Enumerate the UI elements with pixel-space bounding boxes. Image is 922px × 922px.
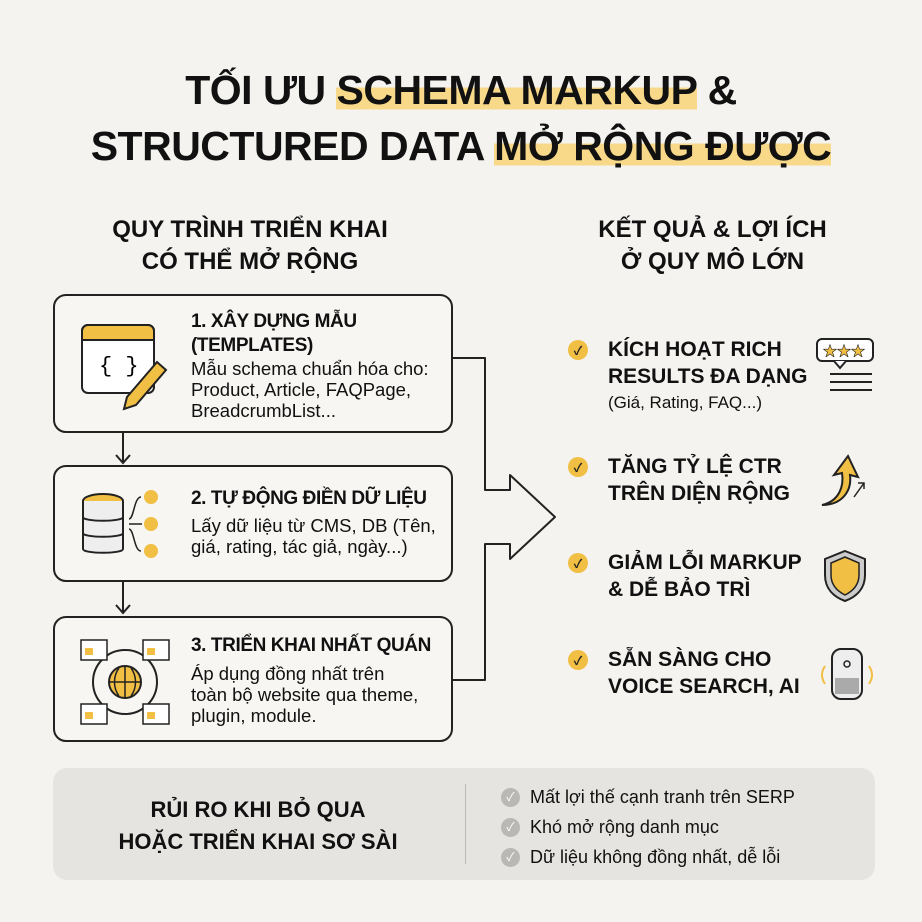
text: step 2 (191, 486, 436, 557)
benefit 1: ✓ (574, 344, 582, 358)
text: step 3: Áp dụng đồng nhất trên (191, 663, 384, 684)
benefit 2 (568, 454, 865, 506)
heading: right (598, 215, 827, 275)
benefit 2: ✓ (574, 460, 582, 474)
risks list (501, 787, 795, 867)
benefit 2: TRÊN DIỆN RỘNG (608, 482, 790, 505)
heading: right: Ở QUY MÔ LỚN (621, 248, 804, 275)
benefit 2: TĂNG TỶ LỆ CTR (608, 455, 782, 478)
arrow: down 2 (115, 582, 131, 614)
text: step 3 (191, 634, 431, 726)
icon: globe network (80, 639, 170, 725)
text: step 1: 1. XÂY DỰNG MẪU (191, 311, 357, 332)
heading: left: CÓ THỂ MỞ RỘNG (142, 248, 358, 275)
risks list: Mất lợi thế cạnh tranh trên SERP (530, 787, 795, 807)
text: step 2: Lấy dữ liệu từ CMS, DB (Tên, (191, 515, 436, 536)
benefit 4: ✓ (574, 654, 582, 668)
benefit 3: ✓ (574, 556, 582, 570)
risks list: Dữ liệu không đồng nhất, dễ lỗi (530, 847, 780, 867)
text: step 3: plugin, module. (191, 705, 316, 726)
icon: shield (824, 550, 866, 602)
text: step 2: 2. TỰ ĐỘNG ĐIỀN DỮ LIỆU (191, 488, 427, 509)
benefit 1: (Giá, Rating, FAQ...) (608, 393, 762, 412)
icon: rating (816, 338, 874, 391)
benefit 3: GIẢM LỖI MARKUP (608, 551, 802, 574)
text: step 3: 3. TRIỂN KHAI NHẤT QUÁN (191, 635, 431, 656)
benefit 4 (568, 647, 873, 700)
benefit 4: SẴN SÀNG CHO (608, 648, 771, 671)
panel: step 1 (53, 294, 453, 433)
text: step 1: (TEMPLATES) (191, 335, 313, 356)
icon: code template (81, 324, 168, 410)
title: STRUCTURED DATA MỞ RỘNG ĐƯỢC (91, 123, 831, 169)
heading: left (112, 216, 388, 275)
benefit 3: & DỄ BẢO TRÌ (608, 578, 750, 601)
risks list: ✓ (506, 820, 515, 834)
text: step 1: Mẫu schema chuẩn hóa cho: (191, 358, 429, 379)
risks heading: HOẶC TRIỂN KHAI SƠ SÀI (118, 829, 398, 854)
benefit 1 (568, 337, 874, 412)
risks list: ✓ (506, 790, 515, 804)
connector arrow (453, 357, 556, 681)
panel: step 2 (53, 465, 453, 582)
icon: smart speaker (821, 648, 873, 700)
arrow: down 1 (115, 433, 131, 464)
heading: left: QUY TRÌNH TRIỂN KHAI (112, 216, 388, 243)
text: step 3: toàn bộ website qua theme, (191, 684, 418, 705)
benefit 3 (568, 550, 866, 602)
risks heading (118, 796, 398, 854)
panel: risks (53, 768, 875, 880)
text: step 1 (191, 310, 429, 421)
benefit 1: RESULTS ĐA DẠNG (608, 365, 808, 388)
icon: rating: ★★★ (823, 343, 865, 359)
benefit 1: KÍCH HOẠT RICH (608, 338, 782, 361)
text: step 1: Product, Article, FAQPage, (191, 379, 411, 400)
text: step 1: BreadcrumbList... (191, 400, 336, 421)
title: TỐI ƯU SCHEMA MARKUP & (185, 67, 737, 113)
risks heading: RỦI RO KHI BỎ QUA (150, 797, 366, 822)
risks list: Khó mở rộng danh mục (530, 817, 719, 837)
benefit 4: VOICE SEARCH, AI (608, 675, 800, 698)
icon: code template: { } (99, 354, 139, 379)
icon: up arrow (822, 454, 865, 506)
text: step 2: giá, rating, tác giả, ngày...) (191, 536, 408, 557)
panel: step 3 (53, 616, 453, 742)
icon: database (82, 490, 158, 558)
title (91, 67, 831, 169)
heading: right: KẾT QUẢ & LỢI ÍCH (598, 216, 827, 243)
risks list: ✓ (506, 850, 515, 864)
